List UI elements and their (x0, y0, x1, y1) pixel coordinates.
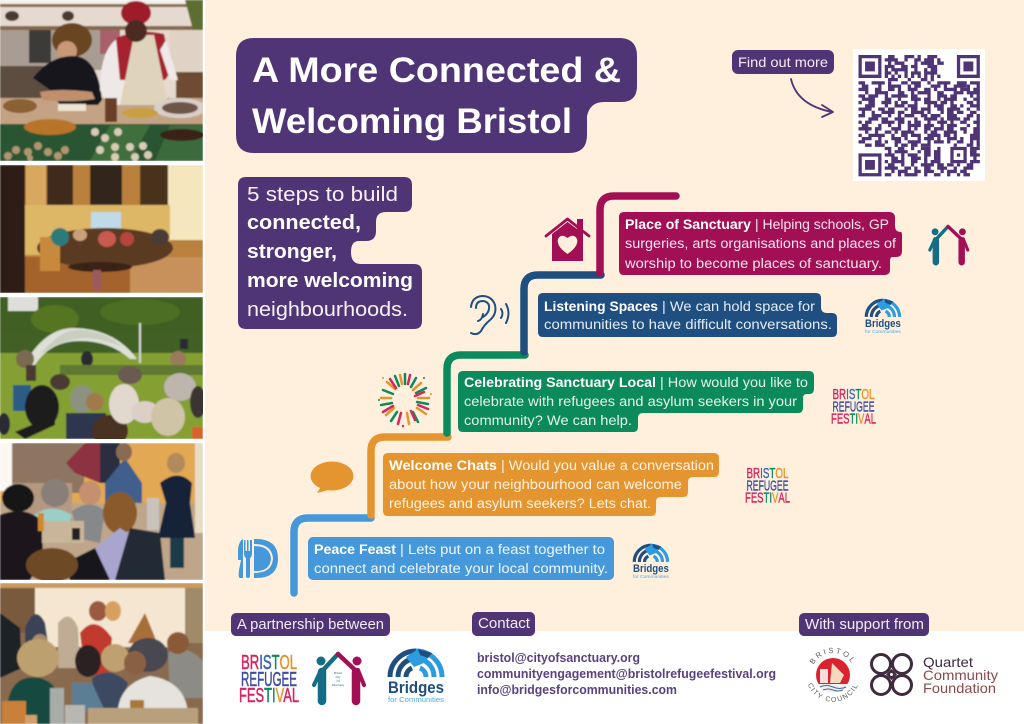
logo: Quartet Community Foundation: Community (923, 667, 998, 683)
staircase line (294, 196, 676, 593)
QR code (853, 49, 985, 181)
logo: Bridges for Communities (footer) (388, 649, 444, 704)
step 1: peace feast: connect and celebrate your local community. (314, 561, 608, 576)
title (236, 38, 637, 153)
logo: Bridges for Communities (Peace Feast) (633, 544, 669, 580)
logo: Bristol Refugee Festival (footer): REFUGEE (241, 669, 297, 691)
arrow to QR code (791, 79, 833, 117)
step 4: listening spaces (538, 293, 837, 337)
logo: City of Sanctuary figures (footer): City (336, 675, 341, 679)
step 2: welcome chats: refugees and asylum seekers? Lets chat. (389, 496, 651, 511)
step 5: place of sanctuary: worship to become places of sanctuary. (624, 256, 882, 271)
step 4: listening spaces: Listening Spaces (544, 299, 658, 314)
step 3: celebrating sanctuary local: celebrate with refugees and asylum seekers in your (464, 394, 798, 409)
photo: outdoor gathering under a canopy (0, 297, 203, 439)
logo: Bristol Refugee Festival (Celebrating Sanctuary Local): BRISTOL (832, 386, 874, 403)
logo: Bridges for Communities (Listening Spaces): Bridges (865, 318, 901, 330)
intro text block: more welcoming (247, 269, 413, 292)
intro text block: stronger, (247, 240, 337, 263)
logo: Quartet Community Foundation: Foundation (923, 680, 996, 696)
logo: City of Sanctuary figures (footer): Sanctuary (332, 683, 345, 687)
logo: Bridges for Communities (footer): for Communities (388, 695, 444, 704)
logo: Bridges for Communities (Listening Spaces) (865, 299, 901, 335)
step 5: place of sanctuary (619, 212, 902, 275)
step 4: listening spaces: communities to have difficult conversations. (544, 317, 832, 332)
logo: City of Sanctuary figures (footer) (314, 654, 364, 701)
step 3: celebrating sanctuary local: community? We can help. (464, 413, 632, 428)
find out more label (732, 50, 834, 74)
logo: Bristol Refugee Festival (footer): BRISTOL (241, 652, 297, 674)
step 2: welcome chats: about how your neighbourhood can welcome (389, 477, 682, 492)
logo: Bristol City Council (808, 648, 858, 702)
title: A More Connected & (252, 51, 621, 90)
logo: Bristol Refugee Festival (Welcome Chats): BRISTOL (746, 465, 788, 482)
step 2: welcome chats: Welcome Chats (389, 458, 497, 473)
photo: meeting in a hall (0, 165, 203, 293)
label: with support from (799, 613, 929, 636)
intro text block (238, 177, 422, 329)
logo: Bristol Refugee Festival (Welcome Chats) (745, 465, 790, 506)
label: contact (472, 612, 535, 636)
photo: people talking around tables (0, 443, 203, 580)
logo: Bridges for Communities (Peace Feast): Bridges (633, 563, 669, 575)
logo: Bristol City Council: BRISTOL (810, 648, 854, 664)
logo: Bridges for Communities (Listening Spaces): for Communities (865, 329, 901, 335)
logo: City of Sanctuary figures (footer): Bristol (334, 671, 342, 675)
logo: Bristol Refugee Festival (Celebrating Sanctuary Local): FESTIVAL (831, 411, 876, 428)
step 1: peace feast: | Lets put on a feast together to (400, 542, 605, 557)
logo: Bristol Refugee Festival (Welcome Chats): FESTIVAL (745, 490, 790, 507)
logo: Bridges for Communities (Peace Feast): for Communities (633, 574, 669, 580)
logo: Quartet Community Foundation (872, 654, 998, 696)
photo: food stall cooks (0, 0, 203, 161)
step 5: place of sanctuary: surgeries, arts organisations and places of (625, 236, 896, 251)
logo: Bristol Refugee Festival (Celebrating Sanctuary Local) (831, 386, 876, 428)
intro text block: connected, (247, 211, 361, 234)
logo: Bristol Refugee Festival (Celebrating Sanctuary Local): REFUGEE (832, 399, 874, 416)
logo: Bristol Refugee Festival (footer) (239, 652, 299, 707)
logo: City of Sanctuary figures (footer): Of (337, 679, 340, 683)
icon: ear with sound waves (471, 296, 508, 334)
title: Welcoming Bristol (252, 102, 572, 141)
step 3: celebrating sanctuary local: Celebrating Sanctuary Local (464, 375, 656, 390)
contact email addresses (477, 651, 776, 697)
logo: City of Sanctuary figures (Place of Sanctuary) (930, 227, 968, 262)
step 1: peace feast: Peace Feast (314, 542, 397, 557)
logo: Bristol Refugee Festival (footer): FESTIVAL (239, 685, 299, 707)
contact email addresses: communityengagement@bristolrefugeefestival.org (477, 667, 776, 681)
photo: workshop crowd in warm light (0, 583, 203, 724)
step 4: listening spaces: | We can hold space for (662, 299, 816, 314)
step 3: celebrating sanctuary local: | How would you like to (660, 375, 808, 390)
logo: Bridges for Communities (footer): Bridges (388, 678, 444, 697)
icon: fireworks (378, 374, 432, 427)
step 3: celebrating sanctuary local (458, 371, 814, 432)
icon: speech bubble (310, 462, 354, 493)
label: with support from: With support from (805, 617, 924, 633)
intro text block: 5 steps to build (247, 183, 398, 206)
icon: plate and cutlery (238, 539, 278, 578)
logo: Bristol City Council: CITY COUNCIL (808, 683, 858, 702)
logo: Quartet Community Foundation: Quartet (923, 654, 973, 670)
find out more label: Find out more (738, 54, 828, 70)
step 1: peace feast (308, 537, 614, 580)
step 2: welcome chats (383, 453, 719, 516)
step 5: place of sanctuary: | Helping schools, GP (755, 217, 889, 232)
contact email addresses: bristol@cityofsanctuary.org (477, 651, 640, 665)
label: a partnership between: A partnership between (237, 617, 384, 633)
label: contact: Contact (478, 616, 530, 632)
label: a partnership between (231, 613, 390, 636)
step 2: welcome chats: | Would you value a conversation (501, 458, 714, 473)
logo: Bristol Refugee Festival (Welcome Chats): REFUGEE (746, 478, 788, 495)
icon: house with heart (546, 219, 589, 261)
contact email addresses: info@bridgesforcommunities.com (477, 683, 677, 697)
intro text block: neighbourhoods. (247, 298, 408, 321)
step 5: place of sanctuary: Place of Sanctuary (625, 217, 752, 232)
